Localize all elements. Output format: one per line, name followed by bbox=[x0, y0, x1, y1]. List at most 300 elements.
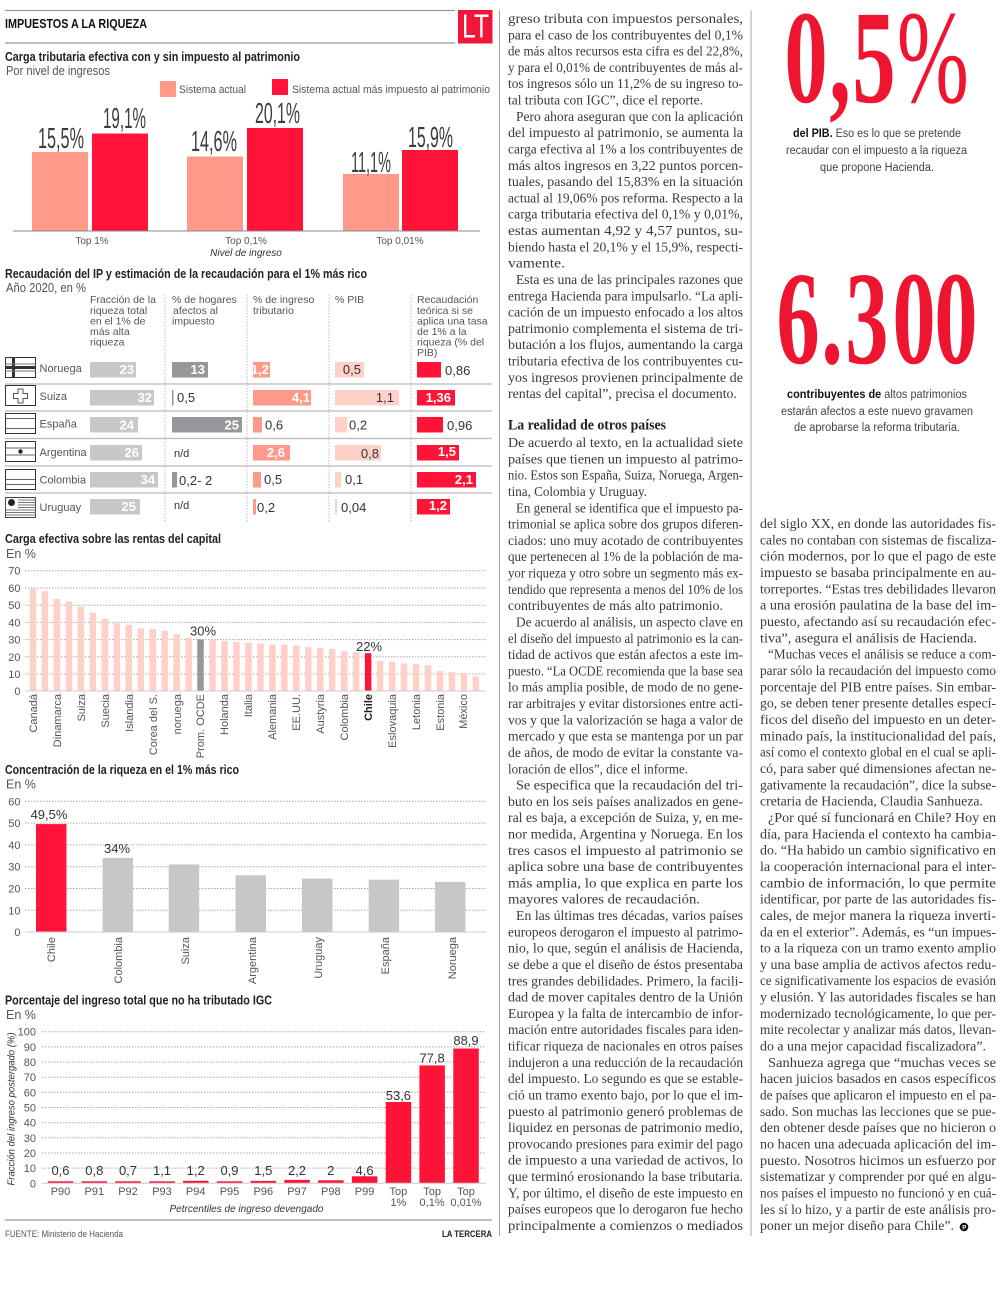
country names: Argentina bbox=[40, 447, 87, 459]
grouped bar chart: 19,1% bbox=[103, 103, 146, 135]
text column: article middle: patrimonio complementa el sistema de tri- bbox=[508, 322, 743, 337]
y axis title: Fracción del ingreso postergado (%) bbox=[6, 1032, 18, 1186]
x axis labels: P96 bbox=[254, 1186, 273, 1198]
caption: que propone Hacienda. bbox=[820, 162, 934, 174]
text column: article right: to a la riqueza con un tramo exento amplio bbox=[760, 942, 996, 957]
text column: article right: do a una mejor capacidad fiscalizadora”. bbox=[760, 1040, 986, 1055]
footer: source and credit bbox=[5, 1220, 492, 1239]
grouped bar chart: 14,6% bbox=[191, 126, 237, 158]
text column: article right: có, para saber qué dimensiones afectan ne- bbox=[760, 762, 996, 777]
y axis bbox=[8, 796, 20, 939]
bar chart: countries bbox=[30, 589, 479, 691]
text column: article middle: tributaria efectiva de los contribuyentes cu- bbox=[508, 354, 743, 370]
column headers: en el 1% de bbox=[90, 316, 146, 328]
x axis title: Petrcentiles de ingreso devengado bbox=[170, 1203, 324, 1215]
chart subtitle: Por nivel de ingresos bbox=[6, 64, 110, 78]
x axis labels: Estonia bbox=[435, 693, 447, 731]
table title: Recaudación del IP y estimación de la recaudación para el 1% más rico bbox=[5, 267, 367, 281]
column: fracción de la riqueza: 25 bbox=[122, 499, 136, 514]
text column: article middle: En general se identifica que el impuesto pa- bbox=[516, 501, 743, 516]
y axis: 20 bbox=[24, 1148, 36, 1160]
column: PIB: 0,1 bbox=[345, 472, 363, 487]
column: hogares afectos: n/d bbox=[174, 500, 189, 512]
text column: article middle: dad de mover capitales dentro de la Unión bbox=[508, 991, 743, 1006]
panel: carga efectiva sobre las rentas del capital bbox=[5, 532, 486, 758]
y axis: 0 bbox=[30, 1178, 36, 1190]
text column: article middle: tres grandes debilidades. Primero, la facili- bbox=[508, 974, 743, 989]
x axis labels: Dinamarca bbox=[52, 693, 64, 747]
value labels: 1,5 bbox=[254, 1163, 272, 1178]
text column: article middle: trimonial se aplica sobre dos grupos diferen- bbox=[508, 518, 743, 533]
country names bbox=[40, 363, 87, 514]
column: PIB: 0,8 bbox=[361, 446, 379, 461]
column headers: Recaudación bbox=[417, 294, 478, 306]
x axis labels bbox=[28, 693, 470, 758]
x axis labels: P90 bbox=[51, 1186, 70, 1198]
text column: article middle: estas aumentan 4,92 y 4,57 puntos, su- bbox=[508, 224, 743, 239]
column: recaudación teórica: 2,1 bbox=[455, 472, 473, 487]
text column: article middle: más amplia, lo que explica en parte los bbox=[508, 876, 743, 891]
column headers: % PIB bbox=[335, 294, 364, 306]
text column: article middle: ció un tramo exento bajo, por lo que el im- bbox=[508, 1088, 743, 1104]
legend: Sistema actual más impuesto al patrimonio bbox=[292, 84, 490, 96]
x axis labels: Argentina bbox=[247, 936, 259, 984]
x axis labels: Top bbox=[457, 1186, 475, 1198]
text column: article middle: que terminó erosionando la base tributaria. bbox=[508, 1170, 743, 1185]
chart subtitle: En % bbox=[6, 778, 36, 792]
x axis labels: Chile bbox=[363, 694, 375, 721]
caption: contribuyentes de altos patrimonios bbox=[787, 389, 967, 401]
x axis labels: P95 bbox=[220, 1186, 239, 1198]
text column: article right: ficos del diseño del impuesto en un deter- bbox=[760, 713, 996, 728]
column: ingreso tributario: 0,5 bbox=[264, 472, 282, 487]
column: recaudación teórica: 0,96 bbox=[447, 418, 472, 433]
x axis labels: Islandia bbox=[124, 693, 136, 732]
y axis: 80 bbox=[24, 1057, 36, 1069]
chart title: Carga tributaria efectiva con y sin impuesto al patrimonio bbox=[5, 50, 300, 64]
column: fracción de la riqueza: 23 bbox=[120, 362, 134, 377]
column: ingreso tributario: 4,1 bbox=[292, 390, 310, 405]
text column: article middle: países que tienen un impuesto al patrimo- bbox=[508, 452, 743, 467]
x axis labels: Austyria bbox=[315, 693, 327, 734]
x axis labels: México bbox=[458, 694, 470, 729]
x axis labels: Uruguay bbox=[313, 937, 325, 979]
grouped bar chart: Top 0,01% bbox=[376, 236, 424, 247]
column: PIB: 0,5 bbox=[343, 362, 361, 377]
x axis labels: P94 bbox=[186, 1186, 205, 1198]
value callouts: 22% bbox=[356, 639, 382, 654]
column headers: PIB) bbox=[417, 347, 437, 359]
text column: article middle: buto en los seis países analizados en gene- bbox=[508, 795, 743, 810]
chart subtitle: En % bbox=[6, 1008, 36, 1022]
column headers: % de hogares bbox=[172, 294, 237, 306]
panel: concentración de la riqueza bbox=[5, 763, 486, 984]
text column: article middle: países europeos que lo derogaron fue hecho bbox=[508, 1203, 743, 1218]
heading: Impuestos a la riqueza: IMPUESTOS A LA RIQUEZA bbox=[5, 17, 147, 31]
text column: article middle: Se especifica que la recaudación del tri- bbox=[516, 779, 743, 794]
text column: article right: torreportes. “Estas tres debilidades llevaron bbox=[760, 582, 996, 597]
x axis labels: Suiza bbox=[180, 936, 192, 965]
text column: article middle: del impuesto al patrimonio, se aumenta la bbox=[508, 126, 744, 141]
x axis labels: Top bbox=[390, 1186, 407, 1198]
column: fracción de la riqueza: 34 bbox=[141, 472, 156, 487]
text column: article middle: del impuesto. Lo segundo es que se estable- bbox=[508, 1072, 743, 1087]
text column: article middle: lo más amplia posible, de modo de no gene- bbox=[508, 681, 743, 696]
flag: Noruega bbox=[6, 358, 36, 378]
text column: article middle: más altos ingresos en 3,22 puntos porcen- bbox=[508, 159, 743, 174]
country names: Noruega bbox=[40, 363, 83, 375]
text column: article right: minado país, la institucionalidad del país, bbox=[760, 729, 996, 744]
value labels: 2 bbox=[327, 1163, 334, 1178]
text column: article middle: provocando presiones para eximir del pago bbox=[508, 1137, 743, 1152]
text column: article middle: el diseño del impuesto al patrimonio es la can- bbox=[508, 632, 743, 647]
text column: article middle: entrega Hacienda para impulsarlo. “La apli- bbox=[508, 289, 743, 304]
text column: article middle: carga tributaria efectiva del 0,1% y 0,01%, bbox=[508, 208, 743, 223]
text column: article right: cretaria de Hacienda, Claudia Sanhueza. bbox=[760, 795, 983, 810]
y axis: 90 bbox=[24, 1042, 36, 1054]
column: recaudación teórica: 0,86 bbox=[445, 363, 470, 378]
text column: article right: tiva”, asegura el análisis de Hacienda. bbox=[760, 631, 977, 646]
text column: article middle: Europea y la falta de intercambio de infor- bbox=[508, 1007, 743, 1022]
text column: article right: gativamente la recaudación”, dice la subse- bbox=[760, 778, 996, 793]
y axis: 10 bbox=[8, 905, 20, 917]
country names: Colombia bbox=[40, 474, 87, 486]
x axis labels: Letonia bbox=[411, 693, 423, 730]
text column: article middle: ral es baja, a excepción de Suiza, y, en me- bbox=[508, 811, 743, 826]
text column: article middle: que pertenecen al 1% de la población de ma- bbox=[508, 550, 743, 565]
text column: article middle: de impuesto a una variedad de activos, lo bbox=[508, 1154, 743, 1169]
column headers: riqueza total bbox=[90, 305, 147, 317]
x axis labels: Colombia bbox=[339, 693, 351, 740]
y axis: 70 bbox=[8, 566, 20, 578]
value labels: 77,8 bbox=[419, 1050, 445, 1066]
text column: article middle: tificar riqueza de nacionales en otros países bbox=[508, 1040, 743, 1054]
x axis labels: Canadá bbox=[28, 693, 40, 733]
y axis: 30 bbox=[8, 635, 20, 647]
icon: end mark: P bbox=[962, 1226, 966, 1232]
x axis labels: P97 bbox=[287, 1186, 307, 1198]
x axis labels: 0,1% bbox=[420, 1197, 445, 1209]
flag: Argentina bbox=[6, 442, 36, 462]
text column: article middle: mayores valores de recaudación. bbox=[508, 893, 700, 908]
x axis labels: P99 bbox=[355, 1186, 374, 1198]
caption bbox=[781, 389, 973, 434]
text column: article middle: Esta es una de las principales razones que bbox=[516, 273, 743, 288]
x axis labels: Suecia bbox=[100, 693, 112, 728]
column: fracción de la riqueza: 26 bbox=[125, 445, 139, 460]
column headers: más alta bbox=[90, 326, 130, 338]
column: recaudación teórica: 1,2 bbox=[429, 498, 447, 513]
y axis: 60 bbox=[8, 583, 20, 595]
y axis: 0 bbox=[14, 927, 20, 939]
y axis: 0 bbox=[14, 686, 20, 698]
text column: article middle: nio, lo que, según el análisis de Hacienda, bbox=[508, 942, 743, 957]
text column: article middle: tres casos el impuesto al patrimonio se bbox=[508, 844, 743, 859]
bar chart bbox=[48, 1048, 479, 1183]
text column: article middle: carga efectiva al 1% a los contribuyentes de bbox=[508, 142, 743, 158]
text column: article right: den obtener desde países que no hicieron o bbox=[760, 1121, 996, 1136]
text column: article middle: De acuerdo al análisis, un aspecto clave en bbox=[516, 616, 743, 630]
x axis labels: Alemania bbox=[267, 693, 279, 740]
text column: article right: poner un mejor diseño para Chile”. bbox=[760, 1219, 954, 1234]
column headers: Fracción de la bbox=[90, 294, 156, 306]
credit: LA TERCERA bbox=[442, 1229, 492, 1239]
text column: article middle: europeos derogaron el impuesto al patrimo- bbox=[508, 925, 743, 940]
y axis: 50 bbox=[24, 1102, 36, 1114]
column: hogares afectos: 0,5 bbox=[177, 390, 195, 405]
y axis: 10 bbox=[24, 1163, 36, 1175]
text column: article middle: tendido que representa a menos del 10% de los bbox=[508, 583, 743, 598]
text column: article middle: contribuyentes de más alto patrimonio. bbox=[508, 599, 723, 614]
y axis: 20 bbox=[8, 884, 20, 896]
column headers: tributario bbox=[253, 305, 294, 317]
column: hogares afectos: n/d bbox=[174, 448, 189, 460]
text column: article right: no hacen una adecuada aplicación del im- bbox=[760, 1138, 996, 1152]
value labels: 53,6 bbox=[386, 1088, 411, 1103]
chart title: Concentración de la riqueza en el 1% más rico bbox=[5, 763, 239, 777]
x axis labels: Eslovaquia bbox=[387, 693, 399, 748]
text column: article middle: actual al 19,06% pos reforma. Respecto a la bbox=[508, 191, 744, 206]
x axis labels: P92 bbox=[118, 1186, 138, 1198]
legend bbox=[160, 79, 490, 97]
y axis: 50 bbox=[8, 818, 20, 830]
chart title: Porcentaje del ingreso total que no ha tributado IGC bbox=[5, 994, 272, 1008]
chart subtitle: En % bbox=[6, 547, 36, 561]
bar chart bbox=[36, 824, 466, 932]
flag: Colombia bbox=[6, 470, 36, 490]
column: PIB: 0,2 bbox=[349, 418, 367, 432]
text column: article middle: puesto al patrimonio generó problemas de bbox=[508, 1105, 743, 1120]
text column: article right: go, se deben tener presente detalles especí- bbox=[760, 697, 996, 712]
y axis: 40 bbox=[24, 1118, 36, 1130]
column: PIB: 0,04 bbox=[341, 500, 366, 515]
text column: article middle: tuales, pasando del 15,83% en la situación bbox=[508, 175, 743, 190]
text column: article middle: nio. Estos son España, Suiza, Noruega, Argen- bbox=[508, 469, 743, 484]
y axis: 30 bbox=[8, 862, 20, 874]
column: PIB: 1,1 bbox=[376, 390, 394, 405]
y axis: 40 bbox=[8, 617, 20, 629]
text column: article middle: yor riqueza y otro sobre un segmento más ex- bbox=[508, 566, 743, 582]
grouped bar chart: 15,5% bbox=[38, 123, 84, 155]
grouped bar chart: Top 0,1% bbox=[225, 236, 267, 247]
text column: article middle: biendo hasta el 20,1% y el 15,9%, respecti- bbox=[508, 240, 743, 255]
value labels: 2,2 bbox=[288, 1163, 306, 1178]
column: fracción de la riqueza: 24 bbox=[120, 418, 135, 432]
text column: article middle: rar arbitrajes y evitar distorsiones entre acti- bbox=[508, 697, 743, 712]
column headers: aplica una tasa bbox=[417, 316, 488, 328]
text column: article right: sistematizar y comprender por qué en algu- bbox=[760, 1170, 996, 1185]
text column: article right: a una erosión paulatina de la base del im- bbox=[760, 599, 996, 614]
column headers: afectos al bbox=[173, 305, 218, 317]
text column: article middle: se debe a que el diseño de éstos presentaba bbox=[508, 958, 744, 973]
column headers bbox=[90, 294, 488, 359]
y axis: 60 bbox=[8, 796, 20, 808]
caption: de aprobarse la reforma tributaria. bbox=[794, 422, 960, 434]
text column: article middle: indujeron a una reducción de la recaudación bbox=[508, 1056, 743, 1071]
column: ingreso tributario: 0,2 bbox=[257, 500, 275, 515]
value callouts: 30% bbox=[190, 624, 216, 638]
table subtitle: Año 2020, en % bbox=[6, 281, 86, 295]
text column: article middle: Y, por último, el diseño de este impuesto en bbox=[508, 1186, 743, 1201]
x axis labels: Suiza bbox=[76, 693, 88, 722]
column: recaudación teórica: 1,5 bbox=[438, 444, 456, 459]
column: hogares afectos bbox=[172, 362, 242, 512]
grouped bar chart bbox=[13, 98, 480, 259]
text column: article right: do. “Ha habido un cambio significativo en bbox=[760, 844, 996, 859]
subheading: la realidad de otros países: La realidad de otros países bbox=[508, 418, 666, 434]
column: fracción de la riqueza bbox=[90, 362, 158, 514]
text column: article right: cambio de información, lo que permite bbox=[760, 876, 996, 891]
panel: recaudación table bbox=[5, 267, 492, 522]
flag: Suiza bbox=[6, 386, 36, 406]
text column: article middle: liquidez en personas de patrimonio medio, bbox=[508, 1121, 743, 1136]
panel: porcentaje del ingreso que no ha tributado IGC bbox=[5, 994, 486, 1215]
text column: article right: y una base amplia de activos afectos redu- bbox=[760, 958, 996, 973]
x axis labels: noruega bbox=[172, 693, 184, 734]
header: section title and logo bbox=[5, 8, 492, 44]
y axis: 20 bbox=[8, 652, 20, 664]
text column: article middle: yos ingresos provienen principalmente de bbox=[508, 371, 743, 386]
x axis labels: EE.UU. bbox=[291, 694, 303, 731]
text column: article right: mite recolectar y analizar más datos, llevan- bbox=[760, 1023, 996, 1038]
caption: estarán afectos a este nuevo gravamen bbox=[781, 406, 973, 418]
text column: article middle: ciados: uno muy acotado de contribuyentes bbox=[508, 534, 743, 549]
column headers: teórica si se bbox=[417, 305, 473, 317]
value labels: 0,9 bbox=[220, 1163, 239, 1178]
stat: 0,5% bbox=[784, 0, 969, 174]
x axis labels: P98 bbox=[321, 1186, 341, 1198]
source: FUENTE: Ministerio de Hacienda bbox=[5, 1229, 123, 1239]
x axis labels: 0,01% bbox=[450, 1197, 482, 1209]
text column: article right bbox=[760, 517, 996, 1234]
text column: article right: modernizado tecnológicamente, lo que per- bbox=[760, 1007, 996, 1022]
value labels: 1,1 bbox=[153, 1163, 171, 1178]
text column: article middle: tal tributa con IGC”, dice el reporte. bbox=[508, 94, 703, 109]
y axis bbox=[18, 1027, 36, 1190]
text column: article middle: puesto. “La OCDE recomienda que la base sea bbox=[508, 664, 744, 679]
column headers: riqueza bbox=[90, 336, 125, 348]
column headers: riqueza (% del bbox=[417, 336, 484, 348]
text column: article right: puesto, afectando así su recaudación efec- bbox=[760, 615, 996, 630]
flag: Uruguay bbox=[6, 498, 36, 518]
value labels bbox=[51, 1033, 479, 1178]
value callouts bbox=[190, 624, 382, 654]
value callouts bbox=[31, 807, 130, 856]
country names: España bbox=[40, 418, 78, 430]
text column: article middle: nor medida, Argentina y Noruega. En los bbox=[508, 828, 743, 842]
text column: article right: cales no contaban con sistemas de fiscaliza- bbox=[760, 533, 996, 548]
column headers: de 1% a la bbox=[417, 326, 467, 338]
column: ingreso tributario: 0,6 bbox=[265, 418, 283, 432]
text column: article middle: vos y que la valorización se haga a valor de bbox=[508, 713, 743, 728]
text column: article right: del siglo XX, en donde las autoridades fis- bbox=[760, 517, 996, 532]
logo: LT: LT bbox=[462, 8, 489, 44]
column headers: % de ingreso bbox=[253, 294, 314, 306]
text column: article middle: mación entre autoridades fiscales para iden- bbox=[508, 1023, 743, 1038]
text column: article middle bbox=[508, 12, 744, 1234]
text column: article middle: para el caso de los contribuyentes del 0,1% bbox=[508, 28, 743, 43]
chart title: Carga efectiva sobre las rentas del capital bbox=[5, 532, 221, 546]
flag: España bbox=[6, 414, 36, 434]
text column: article middle: de años, de modo de evitar la constante va- bbox=[508, 746, 743, 761]
value labels: 0,6 bbox=[51, 1163, 70, 1178]
text column: article right: Sanhueza agrega que “muchas veces se bbox=[768, 1056, 996, 1071]
x axis labels: Top bbox=[423, 1186, 441, 1198]
y axis: 40 bbox=[8, 840, 20, 852]
value labels: 4,6 bbox=[356, 1163, 374, 1178]
caption: recaudar con el impuesto a la riqueza bbox=[786, 145, 968, 157]
text column: article right: la cooperación internacional para el inter- bbox=[760, 860, 996, 875]
column: recaudación teórica: 1,36 bbox=[426, 390, 451, 405]
y axis bbox=[8, 566, 20, 698]
text column: article middle: aplica sobre una base de contribuyentes bbox=[508, 860, 743, 875]
grouped bar chart: 11,1% bbox=[351, 147, 391, 179]
text column: article middle: greso tributa con impuestos personales, bbox=[508, 12, 743, 27]
y axis: 60 bbox=[24, 1087, 36, 1099]
column: ingreso tributario: 2,6 bbox=[267, 445, 285, 460]
text column: article right: identificar, por parte de las autoridades fis- bbox=[760, 893, 996, 908]
value callouts: 34% bbox=[104, 841, 130, 856]
y axis: 70 bbox=[24, 1072, 36, 1084]
caption bbox=[786, 128, 968, 174]
x axis labels: P93 bbox=[152, 1186, 172, 1198]
column headers: impuesto bbox=[172, 316, 215, 328]
y axis: 30 bbox=[24, 1133, 36, 1145]
value labels: 0,8 bbox=[85, 1163, 103, 1178]
text column: article right: puesto. Nosotros hicimos un esfuerzo por bbox=[760, 1154, 996, 1169]
x axis labels: Colombia bbox=[113, 936, 125, 983]
text column: article right: da en el exterior”. Además, es “un impues- bbox=[760, 925, 996, 940]
text column: article right: sado. Son muchas las lecciones que se pue- bbox=[760, 1105, 996, 1120]
text column: article right: ¿Por qué sí funcionará en Chile? Hoy en bbox=[768, 811, 996, 826]
panel: carga tributaria efectiva bbox=[5, 50, 490, 259]
text column: article middle: mercado y que esta se mantenga por un par bbox=[508, 730, 743, 745]
value labels: 0,7 bbox=[119, 1163, 137, 1178]
x axis labels: P91 bbox=[85, 1186, 104, 1198]
big number: 6.300 bbox=[776, 246, 978, 393]
x axis labels: Chile bbox=[46, 937, 58, 962]
x axis labels: Italia bbox=[243, 693, 255, 717]
grouped bar chart: Top 1% bbox=[75, 236, 109, 247]
y axis: 50 bbox=[8, 600, 20, 612]
country names: Uruguay bbox=[40, 502, 82, 514]
x axis labels: Noruega bbox=[447, 936, 459, 979]
grouped bar chart: 15,9% bbox=[408, 122, 453, 154]
column: recaudación teórica bbox=[417, 362, 476, 514]
column: hogares afectos: 0,2- 2 bbox=[179, 473, 212, 488]
text column: article right: día, para Hacienda el contexto ha cambia- bbox=[760, 827, 996, 842]
country names: Suiza bbox=[40, 391, 68, 403]
grouped bar chart: 20,1% bbox=[255, 98, 300, 130]
text column: article middle: butación a los flujos, aumentando la carga bbox=[508, 338, 744, 353]
y axis: 10 bbox=[8, 669, 20, 681]
text column: article middle: En las últimas tres décadas, varios países bbox=[516, 909, 743, 924]
x axis labels: Corea del S. bbox=[148, 694, 160, 755]
grouped bar chart: Nivel de ingreso bbox=[210, 248, 282, 259]
text column: article middle: Pero ahora aseguran que con la aplicación bbox=[516, 110, 743, 125]
column: hogares afectos: 25 bbox=[225, 418, 239, 432]
x axis labels bbox=[51, 1186, 482, 1209]
text column: article right: porcentaje del PIB entre países. Sin embar- bbox=[760, 680, 996, 695]
text column: article middle: vamente. bbox=[508, 257, 565, 272]
x axis labels: 1% bbox=[390, 1197, 407, 1209]
legend: Sistema actual bbox=[179, 84, 246, 96]
text column: article right: ción modernos, por lo que el pago de este bbox=[760, 550, 996, 565]
text column: article middle: tos ingresos sólo un 11,2% de su ingreso to- bbox=[508, 77, 743, 92]
text column: article middle: loración de ellos”, dice el informe. bbox=[508, 762, 688, 777]
text column: article right: impuesto se basaba principalmente en au- bbox=[760, 566, 996, 581]
text column: article right: cales, de mejor manera la riqueza inverti- bbox=[760, 909, 996, 924]
